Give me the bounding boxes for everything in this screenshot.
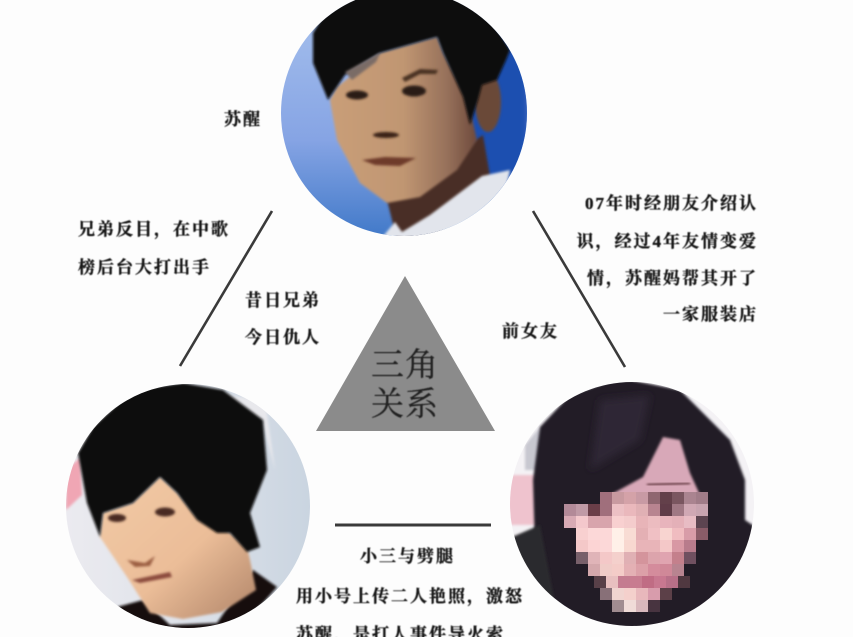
text: bottom relationship note bbox=[296, 547, 524, 637]
forehead bbox=[610, 437, 700, 495]
text: right relationship note bbox=[576, 193, 758, 324]
text: former brothers: 昔日兄弟 bbox=[245, 290, 321, 310]
portrait: lower-left man bbox=[60, 380, 315, 637]
connector: top to left bbox=[180, 211, 272, 366]
ear bbox=[475, 72, 501, 132]
text: right relationship note: 情，苏醒妈帮其开了 bbox=[587, 268, 758, 289]
neck bbox=[387, 135, 490, 240]
shirt bbox=[117, 568, 278, 628]
text: right relationship note: 一家服装店 bbox=[663, 304, 758, 324]
center triangle with title bbox=[316, 276, 495, 431]
hair bbox=[313, 0, 510, 125]
collar bbox=[380, 170, 510, 240]
text: left relationship note: 榜后台大打出手 bbox=[78, 257, 211, 277]
text: former brothers bbox=[245, 290, 321, 347]
label: top person name: 苏醒 bbox=[224, 109, 262, 129]
text: former brothers: 今日仇人 bbox=[245, 327, 321, 347]
hair bbox=[530, 378, 760, 637]
text: bottom relationship note: 小三与劈腿 bbox=[360, 547, 455, 566]
pixel mosaic bbox=[564, 492, 708, 612]
eyes, nose, mouth bbox=[108, 508, 175, 583]
text: right relationship note: 07年时经朋友介绍认 bbox=[585, 193, 758, 213]
text: bottom relationship note: 用小号上传二人艳照，激怒 bbox=[296, 586, 524, 607]
connector: left to right bbox=[335, 524, 491, 526]
text: left relationship note bbox=[78, 219, 230, 277]
portrait: lower-right woman, pixelated face bbox=[505, 378, 760, 637]
connector: top to right bbox=[533, 211, 625, 367]
text: right relationship note: 识，经过4年友情变爱 bbox=[576, 231, 758, 252]
title: 三角 bbox=[371, 348, 439, 384]
portrait: top man bbox=[280, 0, 530, 240]
text: ex-girlfriend: 前女友 bbox=[502, 321, 559, 341]
title line 2: 关系 bbox=[371, 386, 439, 423]
text: left relationship note: 兄弟反目，在中歌 bbox=[78, 219, 230, 240]
face bbox=[100, 477, 256, 619]
hair bbox=[78, 383, 267, 552]
eyebrows, eyes, nose, mouth bbox=[346, 69, 438, 166]
face bbox=[330, 37, 477, 203]
